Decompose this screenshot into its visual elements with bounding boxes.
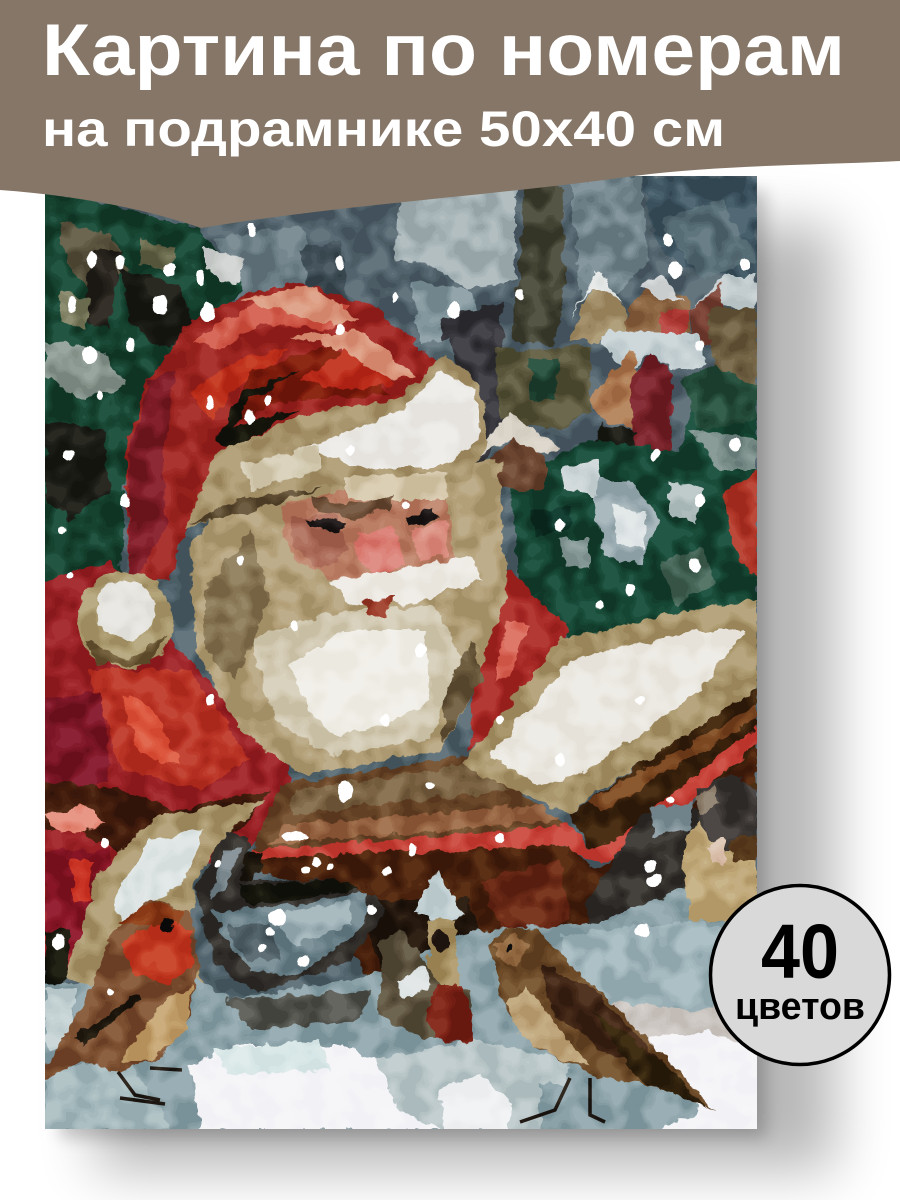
painting: Santa reading a book xyxy=(30,160,770,1140)
open book xyxy=(225,600,757,975)
green fir, top left xyxy=(45,194,244,582)
toy church xyxy=(380,870,473,1042)
hat fur brim xyxy=(185,355,488,530)
village houses xyxy=(495,270,757,460)
red bird on the right edge xyxy=(725,470,757,578)
head base behind face and beard xyxy=(190,460,505,775)
badge: 40 colours: 40 xyxy=(761,909,839,995)
sparrow in front xyxy=(490,928,715,1110)
pom-pom xyxy=(77,572,173,668)
grey mitten xyxy=(195,830,385,992)
beard xyxy=(205,530,482,755)
title: Картина по номерам xyxy=(42,10,845,91)
falling snowflakes xyxy=(52,223,750,997)
right sparrow xyxy=(682,775,757,925)
green fir, right xyxy=(510,365,757,640)
bird legs xyxy=(118,1068,605,1122)
badge: 40 colours: цветов xyxy=(735,986,865,1028)
subtitle: на подрамнике 50х40 см xyxy=(42,101,725,157)
Santa hat xyxy=(125,282,445,590)
right red sleeve xyxy=(470,570,570,750)
painted-by-numbers mottling xyxy=(45,176,757,1129)
header banner xyxy=(0,0,900,228)
tall dark tree xyxy=(510,185,565,345)
Santa coat xyxy=(30,560,290,985)
snow ground xyxy=(30,890,770,1140)
canvas drop shadow xyxy=(60,190,835,1170)
birdhouse xyxy=(470,412,560,490)
face xyxy=(280,472,455,585)
dark mitten and book corner xyxy=(585,810,700,930)
winter forest background xyxy=(214,176,757,463)
fur cuff xyxy=(65,800,265,1000)
badge: 40 colours xyxy=(710,886,890,1064)
robin xyxy=(40,900,198,1082)
